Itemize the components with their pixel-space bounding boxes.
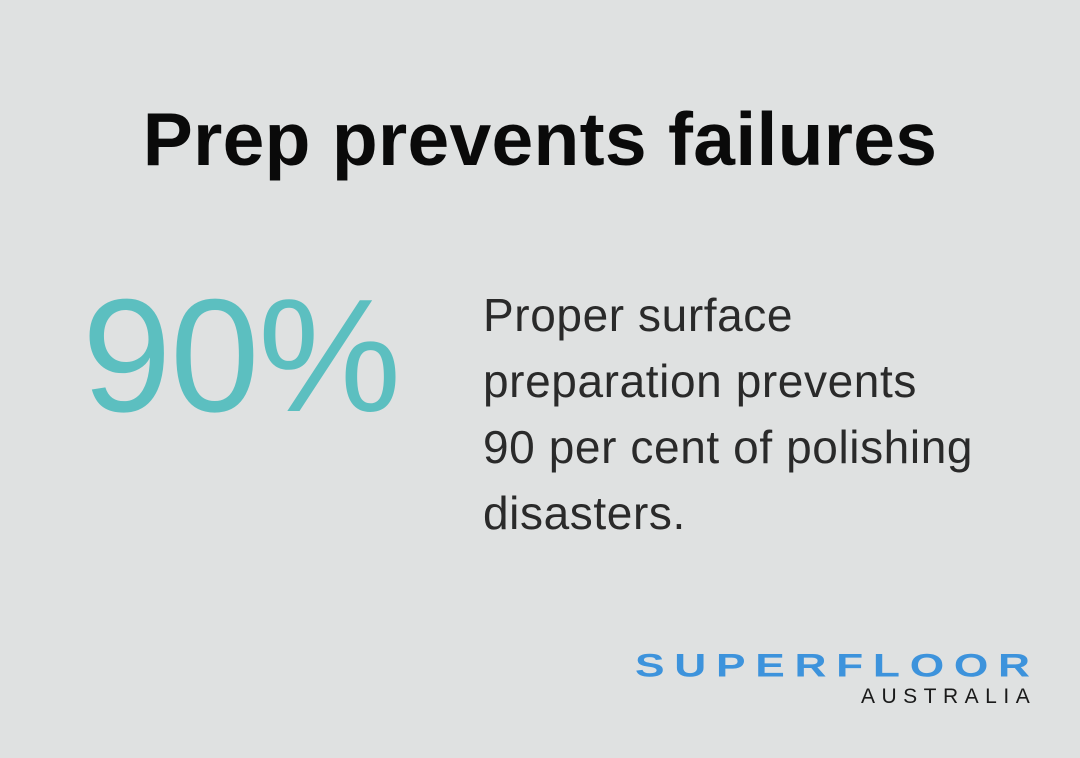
description text: 90 per cent of polishing: [483, 421, 973, 473]
description text: disasters.: [483, 487, 686, 539]
big stat: 90%: [82, 266, 400, 446]
description text: preparation prevents: [483, 355, 917, 407]
description text: [483, 289, 973, 539]
title: Prep prevents failures: [143, 97, 937, 181]
logo wordmark: SUPERFLOOR: [635, 648, 1040, 684]
logo: [635, 648, 1040, 708]
description text: Proper surface: [483, 289, 793, 341]
logo subtitle: AUSTRALIA: [861, 685, 1036, 708]
